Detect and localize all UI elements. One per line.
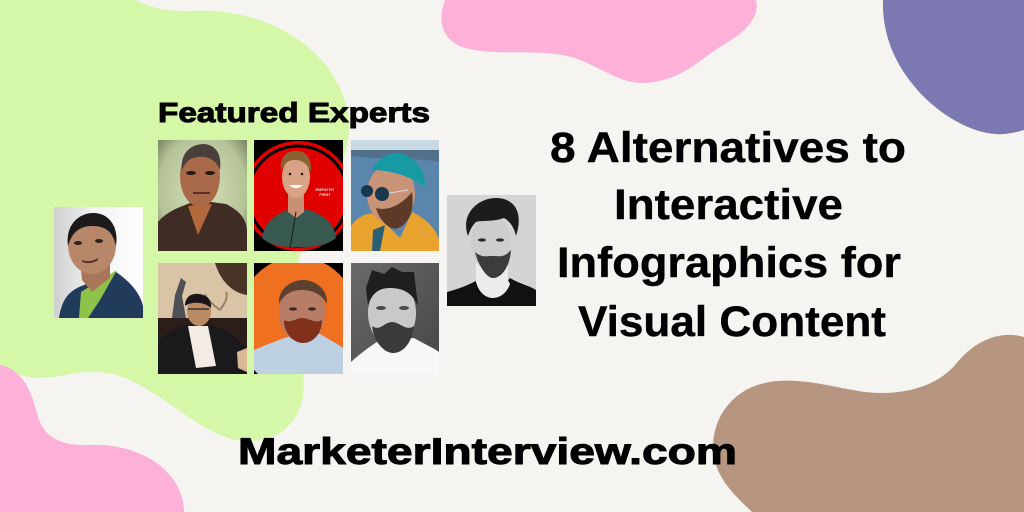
blob: brown [713,335,1024,512]
photo: expert 4 [351,140,439,251]
photo: expert 5 [158,263,247,374]
title: Infographics for [557,239,901,287]
photo: expert 3: EMPATHY [316,187,335,192]
blob: pink bottom left [0,365,184,512]
photo: expert 3: FIRST [319,192,331,197]
website url: MarketerInterview.com [238,431,737,472]
title: 8 Alternatives to [550,124,906,172]
photo: expert 6 [254,263,343,374]
title: Interactive [614,181,843,229]
blob: purple [883,0,1024,134]
title [550,124,906,346]
blob: pink top [441,0,757,83]
title: Visual Content [578,298,886,346]
photo: expert 1 [54,207,143,318]
photo: expert 7 [351,263,439,362]
blob: green [0,0,349,441]
photo: expert 8 [447,195,536,306]
photo: expert 3 [254,140,343,251]
photo: expert 2 [158,140,247,251]
heading: featured experts: Featured Experts [158,97,430,128]
